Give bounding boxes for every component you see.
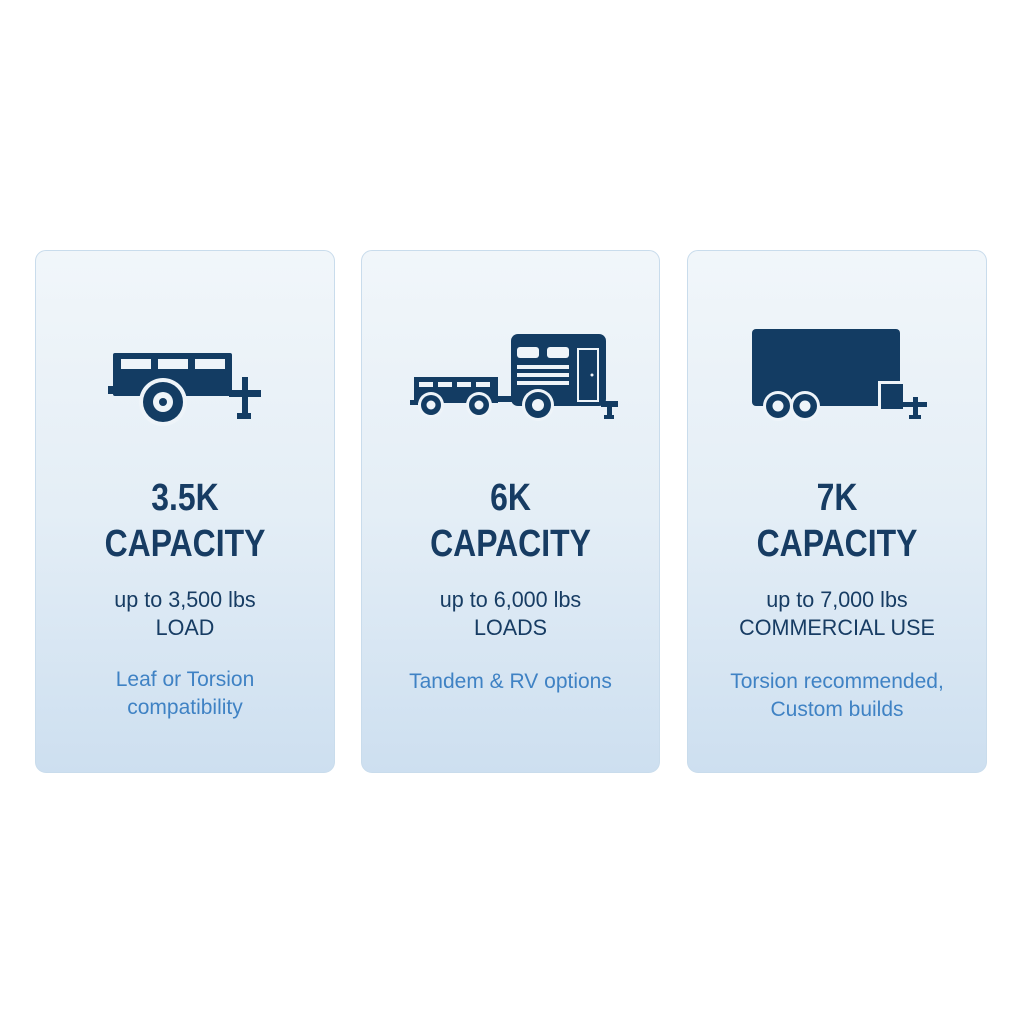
load text: up to 3,500 lbs [114,587,256,612]
load text: up to 6,000 lbs [440,587,581,612]
load text: up to 7,000 lbs [766,587,908,612]
value: 7K [817,477,857,519]
note: Torsion recommended, [730,670,944,693]
note: Tandem & RV options [409,670,612,693]
panel: 3.5K [35,250,335,773]
note: Custom builds [770,698,904,721]
icon: utility trailer [108,353,261,422]
note: compatibility [127,696,243,719]
load text [739,587,935,640]
icon: enclosed trailer [752,329,927,419]
load text: LOAD [156,615,214,640]
value: 3.5K [151,477,219,519]
panel: 7K [687,250,987,773]
load text [114,587,256,640]
load text: COMMERCIAL USE [739,615,935,640]
load text: LOADS [474,615,547,640]
heading: CAPACITY [430,523,591,565]
heading: CAPACITY [757,523,917,565]
load text [440,587,581,640]
heading: CAPACITY [105,523,265,565]
note: Leaf or Torsion [116,668,254,691]
value: 6K [490,477,531,519]
panel: 6K [361,250,660,773]
note [116,668,254,719]
icon: trailer with horse box [410,334,618,419]
note [730,670,944,721]
